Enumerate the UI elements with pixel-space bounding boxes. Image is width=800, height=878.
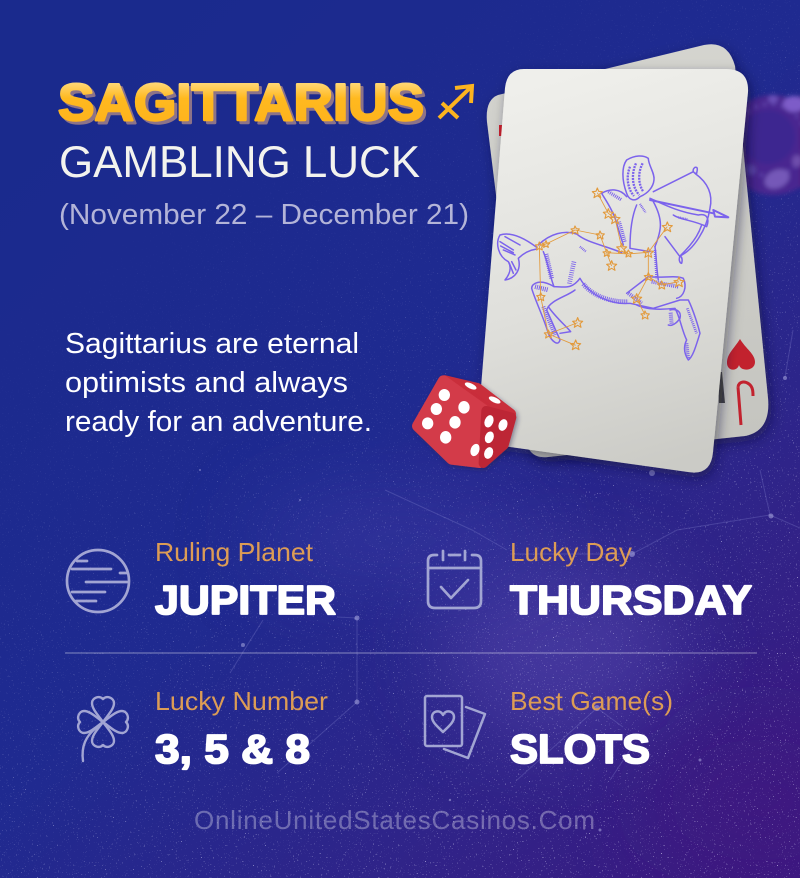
front playing card [478, 69, 748, 473]
description text: optimists and always [65, 367, 348, 399]
label: best games: Best Game(s) [510, 686, 673, 716]
icon: sagittarius symbol [439, 86, 472, 118]
label: ruling planet: Ruling Planet [155, 537, 314, 567]
panel: ruling planet [67, 537, 336, 623]
back playing card [487, 44, 768, 457]
value: Slots: SLOTS [510, 726, 650, 772]
label: lucky number: Lucky Number [155, 686, 328, 716]
icon: calendar [428, 551, 481, 608]
watermark: OnlineUnitedStatesCasinos.Com [194, 805, 595, 835]
title: Sagittarius: SAGITTARIUS [58, 74, 424, 132]
panel: best games [425, 686, 673, 772]
card top-left red pip [499, 125, 503, 136]
description text [65, 328, 372, 438]
panel: lucky day [428, 537, 752, 623]
card picture corner [718, 372, 725, 403]
description text: ready for an adventure. [65, 406, 372, 438]
icon: four-leaf clover [78, 697, 128, 761]
value: Thursday: THURSDAY [510, 577, 752, 623]
icon: planet [67, 550, 129, 612]
label: lucky day: Lucky Day [510, 537, 632, 567]
description text: Sagittarius are eternal [65, 328, 359, 360]
title: Sagittarius: SAGITTARIUS [61, 77, 427, 135]
panel: lucky number [78, 686, 328, 772]
constellation stars [535, 188, 684, 350]
poker chip, blurred [723, 95, 800, 195]
sagittarius centaur illustration [498, 156, 728, 360]
value: Jupiter: JUPITER [155, 577, 336, 623]
value: 3, 5 & 8: 3, 5 & 8 [155, 726, 310, 772]
icon: cards [425, 696, 485, 758]
divider [65, 652, 757, 654]
icon: red dice [417, 381, 512, 463]
date range: (November 22 – December 21) [59, 199, 469, 231]
card heart pip [727, 339, 755, 370]
subtitle: Gambling Luck: GAMBLING LUCK [59, 138, 420, 187]
centaur hatching [535, 163, 697, 358]
card letter J [738, 382, 753, 425]
